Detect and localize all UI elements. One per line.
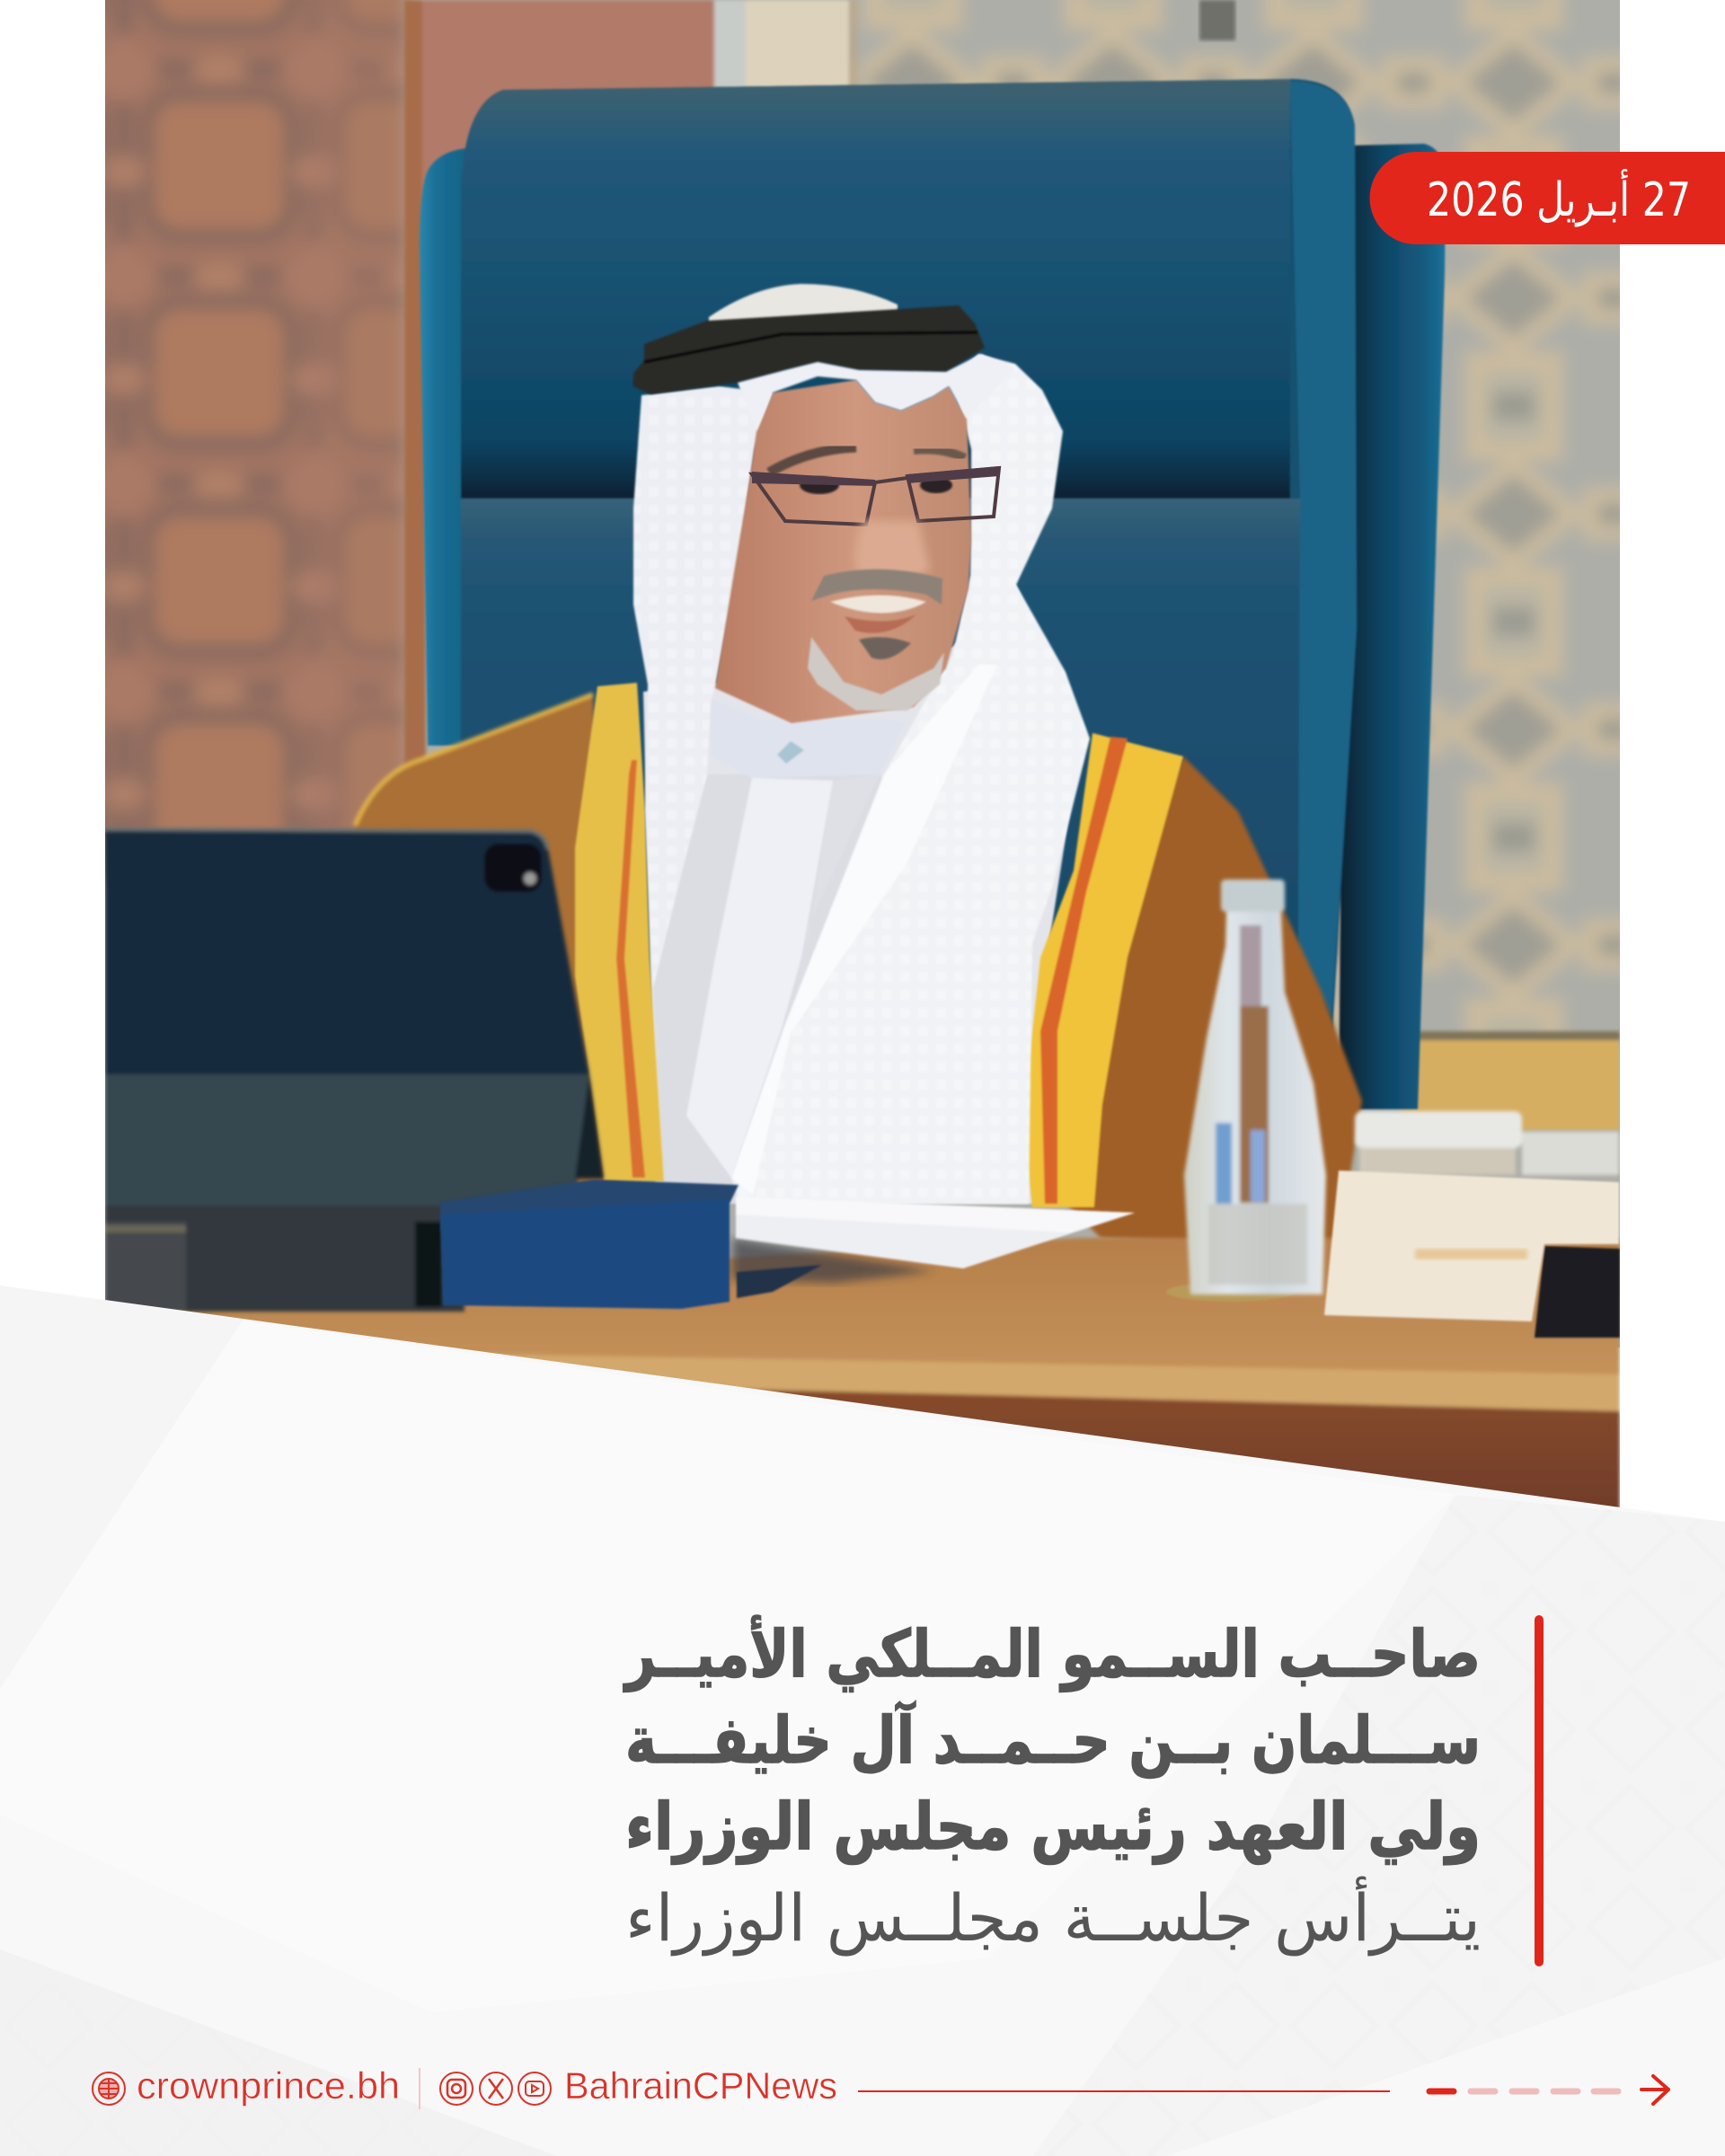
ghutra fold over forehead	[738, 354, 1015, 431]
date tab: 27 أبـريل 2026	[1427, 169, 1691, 227]
ghutra headdress	[633, 284, 1090, 1204]
goatee	[859, 637, 911, 659]
gold trim	[575, 683, 1183, 1207]
moustache	[811, 570, 942, 605]
agal black cord	[633, 305, 985, 394]
glasses	[752, 468, 999, 525]
nose shade	[855, 521, 930, 580]
headline line 4: يتــرأس جلســة مجلــس الوزراء	[625, 1876, 1481, 1957]
pagination dashes	[1429, 2088, 1618, 2095]
table	[174, 1235, 1620, 1507]
arrow	[1641, 2076, 1668, 2104]
water bottle	[1166, 879, 1326, 1302]
icon: youtube	[518, 2072, 551, 2105]
eyebrows	[769, 447, 856, 473]
red accent bar	[1535, 1615, 1544, 1966]
name card	[1324, 1171, 1620, 1338]
footer rule	[858, 2090, 1390, 2092]
date tab	[1370, 152, 1725, 244]
robe	[355, 694, 1362, 1249]
chair	[420, 79, 1446, 1127]
tablet	[105, 829, 604, 1312]
divider	[419, 2068, 420, 2109]
photo: crown prince at cabinet meeting	[90, 0, 1632, 1527]
white thobe	[643, 584, 1083, 1204]
headline text	[624, 1614, 1481, 1957]
blue box	[440, 1180, 822, 1309]
face	[715, 380, 999, 723]
website text: crownprince.bh	[137, 2064, 400, 2107]
icon: instagram	[440, 2072, 473, 2105]
wall background	[90, 0, 1632, 1348]
headline line 1: صاحــب الســمو المــلكي الأميــر	[624, 1614, 1481, 1692]
white diagonal panel	[0, 1286, 1725, 2156]
glass box	[1355, 1111, 1619, 1175]
eyes	[800, 476, 839, 494]
icon: X	[480, 2072, 512, 2105]
social handle text: BahrainCPNews	[564, 2064, 837, 2107]
icon: globe	[93, 2072, 125, 2105]
papers	[732, 1197, 1135, 1283]
headline line 2: ســـلمان بــن حــمــد آل خليفـــة	[625, 1701, 1481, 1779]
footer	[93, 2064, 1668, 2109]
mouth	[830, 595, 926, 613]
headline line 3: ولي العهد رئيس مجلس الوزراء	[625, 1789, 1481, 1865]
